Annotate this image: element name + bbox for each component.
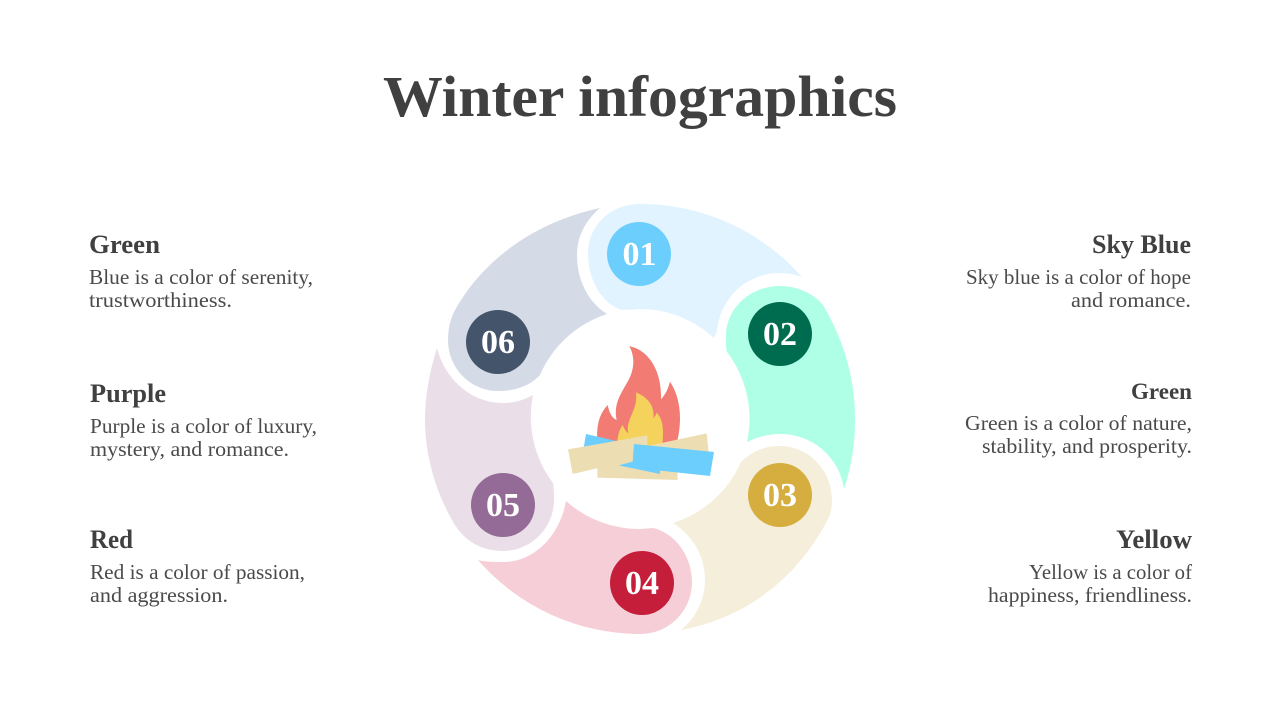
icon: back blue log: [583, 434, 623, 453]
text block: sky blue: Sky blue is a color of hope: [966, 265, 1191, 289]
text block: green (right): Green is a color of nature,: [965, 411, 1192, 435]
text block: green (left): trustworthiness.: [89, 288, 232, 312]
segment 06: slate: [448, 208, 607, 391]
icon: inner flame: [617, 392, 663, 450]
icon: campfire: [568, 346, 714, 480]
text block: yellow: Yellow: [1116, 525, 1192, 554]
text block: sky blue: Sky Blue: [1092, 230, 1191, 259]
text block: yellow: Yellow is a color of: [1029, 560, 1193, 584]
icon: back tan log: [597, 433, 709, 480]
segment 05: purple: 05: [486, 487, 520, 524]
text block: purple: mystery, and romance.: [90, 437, 289, 461]
text block: yellow: [988, 525, 1193, 607]
text block: red: [90, 525, 305, 607]
icon: flame: [597, 346, 680, 450]
text block: green (left): Green: [89, 230, 161, 259]
icon: front blue log: [619, 444, 714, 476]
text block: purple: Purple is a color of luxury,: [90, 414, 317, 438]
segment 02: green: [726, 286, 855, 489]
text block: red: and aggression.: [90, 583, 228, 607]
segment 03: yellow: [673, 446, 832, 630]
segment 02: green: 02: [763, 316, 797, 353]
segment 05: purple: [425, 348, 554, 551]
segment 03: yellow: 03: [763, 477, 797, 514]
text block: green (right): [965, 379, 1192, 458]
text block: yellow: happiness, friendliness.: [988, 583, 1192, 607]
segment 06: slate: 06: [481, 324, 515, 361]
text block: red: Red: [90, 525, 134, 554]
text block: purple: [90, 379, 317, 461]
segment 04: red: [478, 501, 692, 634]
text block: green (right): stability, and prosperity.: [982, 434, 1192, 458]
segment 01: sky blue: 01: [622, 236, 656, 273]
text block: red: Red is a color of passion,: [90, 560, 305, 584]
icon: front tan log: [568, 435, 647, 474]
text block: purple: Purple: [90, 379, 166, 408]
text block: green (left): Blue is a color of serenity,: [89, 265, 313, 289]
cycle diagram: [425, 204, 855, 634]
segment 01: sky blue: [588, 204, 802, 338]
text block: sky blue: and romance.: [1071, 288, 1191, 312]
segment 04: red: 04: [625, 565, 659, 602]
text block: green (right): Green: [1131, 379, 1192, 404]
text block: green (left): [89, 230, 313, 312]
text block: sky blue: [966, 230, 1191, 312]
title: Winter infographics: [383, 64, 897, 129]
